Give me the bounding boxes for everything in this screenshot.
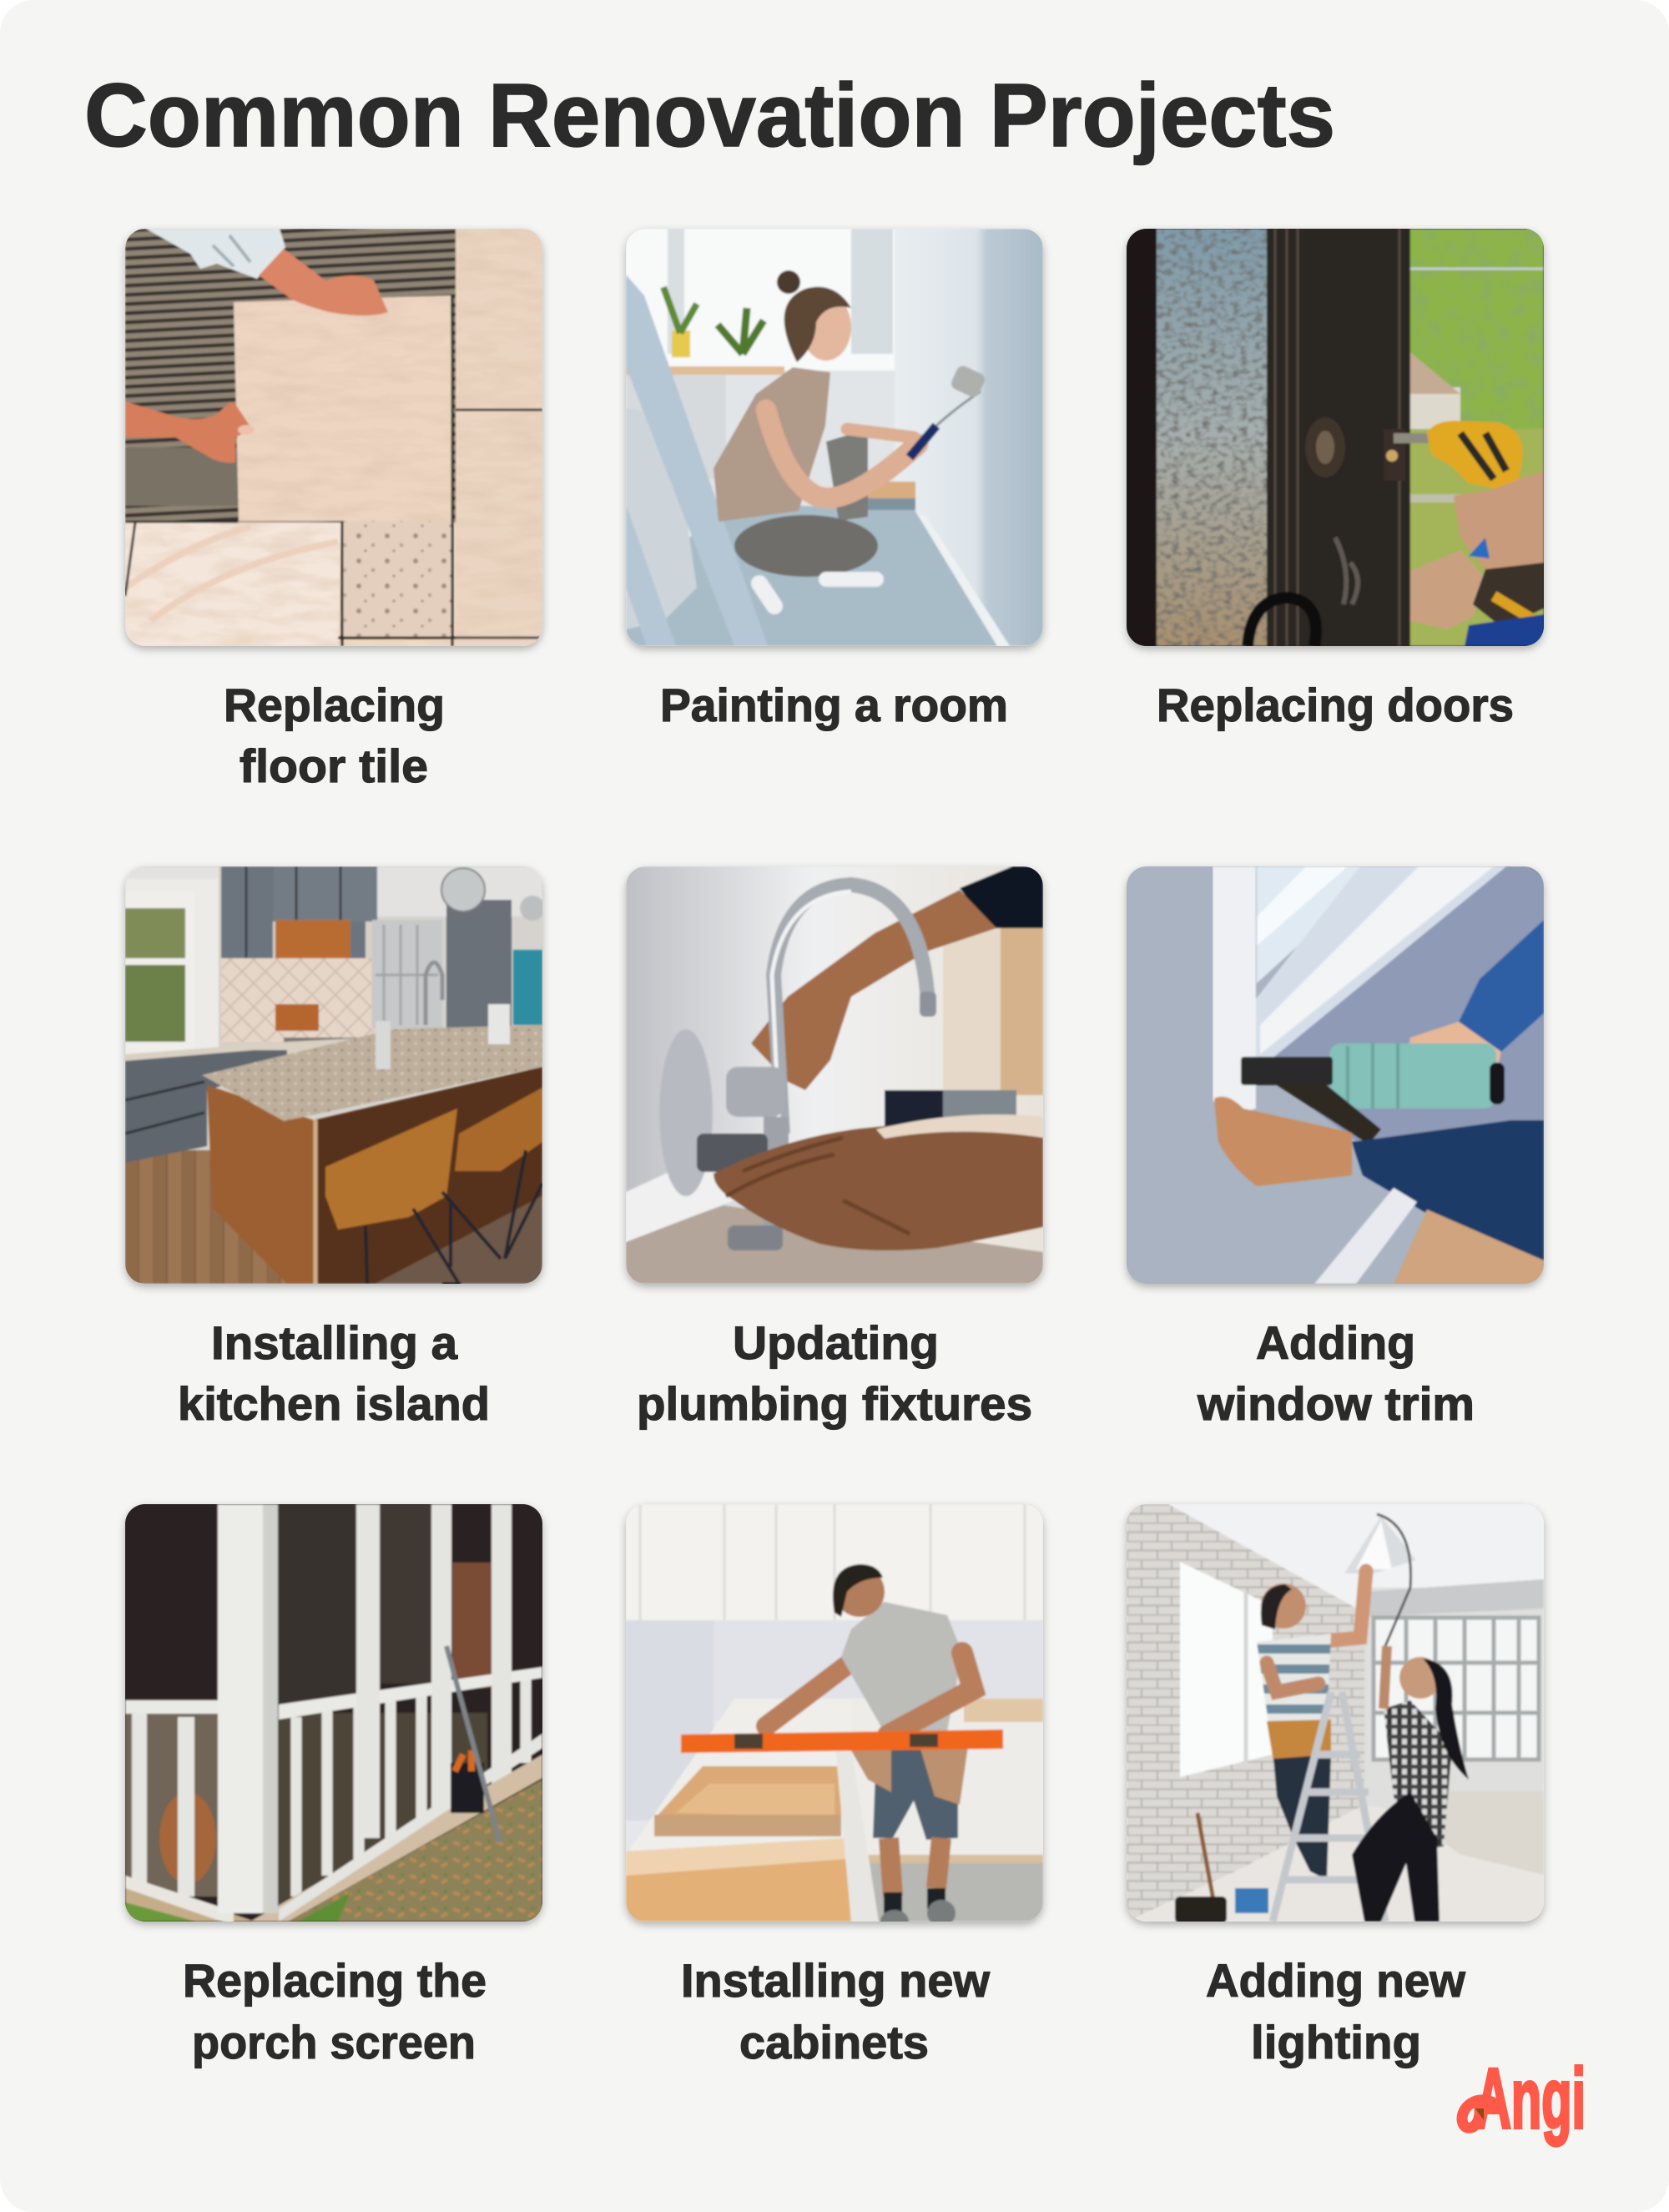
caption: Installing new cabinets: cabinets <box>739 2016 929 2068</box>
caption: Installing new cabinets <box>681 1954 990 2068</box>
caption: Replacing floor tile: floor tile <box>240 740 428 792</box>
logo: Angi <box>1462 2051 1586 2146</box>
panel: painting a room <box>626 229 1043 731</box>
photo: couple installing a ceiling light <box>1122 1502 1549 1930</box>
photo: hands laying floor tile <box>120 227 547 654</box>
photo: man leveling new cabinets <box>621 1502 1048 1930</box>
photo: kitchen with island and stools <box>120 865 547 1292</box>
caption: Installing a kitchen island: Installing a <box>211 1316 458 1369</box>
panel: installing new cabinets <box>626 1504 1043 2068</box>
logo: Angi: Angi <box>1475 2051 1586 2146</box>
caption: Replacing floor tile: Replacing <box>224 679 445 731</box>
caption: Updating plumbing fixtures: Updating <box>733 1316 939 1369</box>
caption: Adding new lighting: lighting <box>1251 2016 1421 2068</box>
caption: Installing a kitchen island: kitchen island <box>178 1377 490 1430</box>
photo: screened porch <box>120 1502 547 1930</box>
caption: Adding window trim: window trim <box>1197 1377 1475 1430</box>
caption: Adding window trim <box>1197 1316 1475 1430</box>
panel: adding new lighting <box>1127 1504 1544 2068</box>
caption: Replacing the porch screen: porch screen <box>192 2016 476 2068</box>
caption: Replacing the porch screen <box>183 1954 487 2068</box>
caption: Replacing floor tile <box>224 679 445 792</box>
caption: Replacing doors: Replacing doors <box>1157 679 1514 731</box>
caption: Updating plumbing fixtures <box>637 1316 1032 1430</box>
panel: updating plumbing fixtures <box>626 866 1043 1430</box>
caption: Adding new lighting: Adding new <box>1206 1954 1465 2007</box>
panel: replacing the porch screen <box>125 1504 542 2068</box>
photo: woman painting a wall with a roller <box>621 227 1048 654</box>
caption: Installing a kitchen island <box>178 1316 490 1430</box>
caption: Adding window trim: Adding <box>1256 1316 1415 1369</box>
panel: installing a kitchen island <box>125 866 545 1430</box>
photo: hands fitting a faucet <box>621 865 1048 1292</box>
caption: Adding new lighting <box>1206 1954 1465 2068</box>
panel: replacing floor tile <box>125 229 542 792</box>
caption: Updating plumbing fixtures: plumbing fixtures <box>637 1377 1032 1430</box>
photo: drilling a door lock <box>1122 227 1549 654</box>
title: Common Renovation Projects <box>84 64 1335 165</box>
panel: adding window trim <box>1127 866 1544 1430</box>
caption: Installing new cabinets: Installing new <box>681 1954 990 2007</box>
caption: Painting a room: Painting a room <box>660 679 1008 731</box>
caption: Replacing the porch screen: Replacing the <box>183 1954 487 2007</box>
photo: nail gun on window trim <box>1122 865 1549 1292</box>
panel: replacing doors <box>1127 229 1544 731</box>
